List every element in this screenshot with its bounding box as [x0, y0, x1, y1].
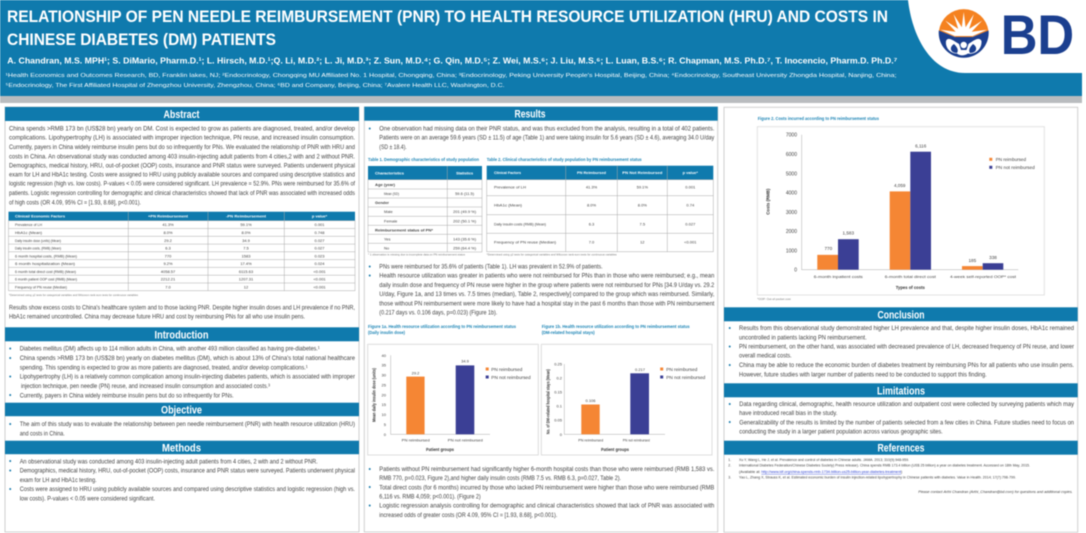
chart: figure 1b hospital stays: Figure 1b. Health resource utilization according to PN reimbursement status [542, 324, 690, 329]
text block: abstract body: Currently, payers in China widely reimburse insulin pens but do so infrequently for PNs. We evaluated the relationship of PNR with HRU and [9, 144, 355, 151]
table: clinical and economic factors: 34.9 [242, 238, 251, 243]
text block: results intro: One observation had missing data on their PNR status, and was thus excluded from the analysis, resulting in a total of 402 patients. [379, 126, 715, 133]
table: clinical and economic factors: Daily insulin costs, (RMB) (Mean) [15, 246, 62, 250]
text block: results costs: RMB 770, p=0.023, Figure 2),and higher daily insulin costs (RMB 7.5 vs. RMB 6.3, p=0.027, Table 2). [379, 475, 621, 482]
affiliations: ¹Health Economics and Outcomes Research, BD, Franklin lakes, NJ; ²Endocrinology, Chongqing MU Affiliated No. 1 Hospital, Chongqing, China; ³Endocrinology, Peking University People's Hospital, Beijing, China; ⁴Endocrinology, Southeast University Zhongda Hospital, Nanjing, China; [6, 72, 897, 79]
text block: results findings: • [368, 264, 372, 271]
heading: introduction [5, 327, 359, 341]
table: clinical and economic factors: 0.748 [314, 230, 325, 235]
table: clinical and economic factors: 17.4% [240, 261, 252, 266]
heading: abstract: Abstract [164, 109, 200, 121]
text block: introduction bullets: • [9, 374, 12, 381]
heading: conclusion [724, 307, 1078, 321]
table 1: demographics: 202 (50.1 %) [453, 218, 477, 223]
text block: conclusion bullets: • [728, 325, 732, 332]
text block: introduction bullets [9, 346, 356, 400]
text block: methods bullets: • [9, 468, 12, 475]
table: clinical and economic factors: 0.027 [314, 238, 325, 243]
table: clinical and economic factors: <0.001 [313, 269, 326, 274]
chart: figure 2 costs: 6,116 [915, 144, 927, 149]
table: clinical and economic factors: 6 month hospitalization (Mean) [15, 261, 76, 266]
text block: results findings [368, 264, 715, 317]
text block: limitations bullets: Generalizability of the results is limited by the number of patients selected from a few cities in China. Future studies need to focus on [739, 419, 1074, 426]
chart: figure 1b hospital stays: (DM-related hospital stays) [542, 330, 595, 335]
title: CHINESE DIABETES (DM) PATIENTS [7, 31, 276, 49]
table: clinical and economic factors: <0.001 [313, 277, 326, 282]
table 2: clinical characteristics: 6.3 [589, 222, 595, 226]
chart: figure 2 costs [757, 116, 1044, 295]
text block: introduction bullets: Diabetes mellitus (DM) affects up to 114 million adults in China, with another 493 million classified as having pre-diabetes.¹ [20, 346, 320, 353]
text block: results findings: daily insulin dose and frequency of PN reuse were higher in the group where patients were not reimbursed for PNs [34.9 U/day vs. 29.2 [379, 282, 715, 289]
table: clinical and economic factors: +PN Reimbursement [148, 214, 189, 219]
table: clinical and economic factors: 7.5 [243, 246, 250, 250]
table 2: clinical characteristics: 0.74 [686, 202, 695, 208]
text block: results costs: increased odds of greater costs (OR 4.09, 95% CI = [1.93, 8.68], p<0.001). [379, 512, 558, 519]
text block: introduction bullets: • [9, 355, 12, 362]
panel: right column [724, 107, 1078, 532]
heading: objective [5, 403, 359, 416]
text block: conclusion bullets: • [728, 362, 732, 369]
table: clinical and economic factors: 0.001 [314, 222, 325, 227]
chart: figure 1a daily insulin dose: 0 [384, 432, 387, 437]
table: clinical and economic factors: 59.1% [240, 222, 252, 227]
text block: introduction bullets: • [9, 393, 12, 400]
table: clinical and economic factors: 29.2 [164, 238, 173, 243]
chart: figure 1a daily insulin dose: 20 [382, 392, 387, 397]
table footnote: *Determined using χ2 tests for categorical variables and Wilcoxon rank-sum tests for continuous variables [9, 293, 139, 297]
chart: figure 1b hospital stays: PN not reimbursed [623, 438, 650, 442]
heading: methods [5, 441, 359, 454]
text block: introduction bullets: Lipohypertrophy (LH) is a relatively common complication among insulin-injecting diabetes patients, which is associated with improper [20, 374, 355, 381]
table: clinical and economic factors: Clinical/ Economic Factors [15, 214, 66, 219]
text block: abstract body: exam for LH and HbA1c testing. Costs were assigned to HRU using publicly available sources and compared using descriptive statistics and [9, 172, 355, 179]
table: clinical and economic factors: 7.0 [165, 284, 172, 290]
chart: figure 2 costs: Figure 2. Costs incurred according to PN reimbursement status [758, 116, 880, 121]
table: clinical and economic factors: 8.0% [241, 230, 251, 235]
chart: figure 2 costs: 338 [989, 255, 997, 260]
text block: methods bullets: An observational study was conducted among 403 insulin-injecting adult patients from 4 cities, 2 with and 2 without PNR. [20, 458, 318, 465]
table 2: clinical characteristics: Clinical Factors [494, 170, 522, 175]
title [7, 8, 888, 49]
table 1: demographics: Yes [384, 236, 391, 241]
text block: conclusion bullets: Results from this observational study demonstrated higher LH prevalence and that, despite higher insulin doses, HbA1c remained [739, 325, 1074, 332]
table: clinical and economic factors: 4058.57 [161, 269, 176, 274]
text block: conclusion bullets: However, future studies with larger number of patients need to be conducted to support this finding. [739, 371, 987, 378]
table: clinical and economic factors: 12 [244, 284, 249, 290]
table 1: demographics: Table 1. Demographic characteristics of study population [368, 157, 479, 162]
text block: results costs: 6,116 vs. RMB 4,059; p<0.001). (Figure 2) [379, 493, 481, 500]
text block: results costs: Logistic regression analysis controlling for demographic and clinical characteristics showed that lack of PNR was associated with [379, 503, 714, 510]
chart: figure 2 costs: Types of costs [896, 285, 925, 290]
chart: figure 1a daily insulin dose: 35 [382, 363, 387, 368]
text block: abstract body: Demographics, medical history, HRU, out-of-pocket (OOP) costs, insurance and PNR status were surveyed. Patients underwent physical [9, 162, 355, 169]
text block: results costs: Patients without PN reimbursement had significantly higher 6-month hospital costs than those who were reimbursed (RMB 1,583 vs. [379, 466, 715, 473]
text block: introduction bullets: Currently, payers in China widely reimburse insulin pens but do so infrequently for PNs. [20, 392, 234, 399]
chart: figure 1b hospital stays: PN reimbursed [666, 367, 698, 372]
text block: limitations bullets: conducting the study in a larger patient population across various geographic sites. [739, 428, 943, 435]
table 2: clinical characteristics: <0.001 [684, 240, 697, 244]
chart: figure 1a daily insulin dose: PN reimbursed [402, 438, 430, 442]
text block: objective: and costs in China. [20, 431, 65, 438]
affiliations [6, 72, 897, 89]
text block: references [728, 458, 1030, 480]
heading: abstract [5, 107, 359, 121]
table: clinical and economic factors: -PN Reimbursement [226, 214, 267, 219]
table: clinical and economic factors: Daily insulin dose (units) (Mean) [15, 238, 62, 243]
panel: results [364, 107, 718, 532]
table: clinical and economic factors: 9.2% [163, 261, 173, 266]
heading: results [364, 107, 718, 121]
text block: conclusion bullets: overall medical costs. [739, 353, 792, 360]
table: clinical and economic factors [8, 212, 355, 291]
chart: figure 1a daily insulin dose: 25 [382, 382, 387, 387]
table 2: clinical characteristics: 12 [640, 240, 645, 244]
heading: references [724, 441, 1078, 455]
text block: results findings: Health resource utilization was greater in patients who were not reimbursed for PNs than in those who were reimbursed; e.g., mean [379, 273, 714, 280]
chart: figure 1a daily insulin dose: 5 [384, 422, 387, 427]
text block: results intro: • [368, 126, 372, 133]
chart: figure 1a daily insulin dose: 10 [382, 412, 387, 417]
text block: results costs: • [368, 466, 372, 473]
text block: abstract body: of high costs (OR 4.09, 95% CI = [1.93, 8.68], p<0.001). [9, 199, 141, 206]
panel: left column [5, 107, 359, 532]
table: clinical and economic factors: 0.023 [314, 253, 325, 258]
table 2: clinical characteristics: 0.001 [685, 184, 696, 190]
table 1: demographics: 59.6 (11.5) [455, 191, 475, 196]
figure 2 footnote: *OOP: Out-of-pocket cost [757, 297, 791, 301]
text block: abstract body: logistic regression (high vs. low costs). P-values < 0.05 were considered significant. LH prevalence = 52.9%. PNs were reimbursed for 35.6% of [9, 181, 355, 188]
chart: figure 1a daily insulin dose: 30 [382, 373, 387, 378]
table: clinical and economic factors: Prevalence of LH [15, 222, 42, 227]
table: clinical and economic factors: 0.027 [314, 246, 325, 250]
text block: results costs: • [368, 503, 372, 510]
text block: introduction bullets: • [9, 346, 12, 353]
text block: references: 3. [728, 476, 731, 480]
text block: abstract body: costs in China. An observational study was conducted among 403 insulin-injecting adult patients from 4 cities,2 with and 2 without PNR. [9, 153, 355, 160]
chart: figure 1a daily insulin dose: 15 [382, 402, 387, 407]
text block: results costs: • [368, 485, 372, 492]
text block: results findings: those without PN reimbursement were more likely to have had a hospital stay in the past 6 months than those with PN reimbursement [379, 300, 715, 307]
heading: limitations [724, 383, 1078, 397]
table: clinical and economic factors: 8.0% [163, 230, 173, 235]
chart: figure 2 costs: 1,583 [843, 231, 854, 236]
icon: BD logo [939, 3, 1074, 66]
table 2: clinical characteristics: 8.0% [638, 202, 647, 208]
table: clinical and economic factors: 6 month hospital costs, (RMB) (Mean) [15, 253, 78, 258]
chart: figure 2 costs: 7000 [786, 133, 797, 139]
chart: figure 2 costs: 6000 [786, 152, 797, 158]
text block: results findings: U/day, Figure 1a, and 13 times vs. 7.5 times (median), Table 2, respectively] compared to the group which was reimbursed. Similarly, [379, 291, 715, 298]
chart: figure 1b hospital stays: Patient groups [601, 447, 630, 452]
chart: figure 1b hospital stays: 0.2 [556, 376, 563, 380]
chart: figure 1b hospital stays: 0.05 [554, 418, 563, 423]
text block: results costs [368, 466, 715, 519]
table: clinical and economic factors: 6 month total direct cost (RMB) (Mean) [15, 269, 77, 274]
chart: figure 1a daily insulin dose: PN not reimbursed [448, 438, 483, 442]
table 2: clinical characteristics: Frequency of PN reuse (Median) [494, 240, 557, 244]
text block: abstract body: patients. Logistic regression controlling for demographic and clinical characteristics showed that lack of PNR was associated with increased odds [9, 190, 355, 197]
authors: A. Chandran, M.S. MPH¹; S. DiMario, Pharm.D.¹; L. Hirsch, M.D.¹;Q. Li, M.D.²; L. Ji, M.D.³; Z. Sun, M.D.⁴; G. Qin, M.D.⁵; Z. Wei, M.S.⁶; J. Liu, M.S.⁶; L. Luan, B.S.⁶; R. Chapman, M.S. Ph.D.⁷, T. Inocencio, Pharm.D. Ph.D.⁷ [7, 56, 898, 66]
text block: references: (Available at: http://www.idf.org/china-spends-rmb-1734-billion-us25-billion-year-diabetes-treatment ) [739, 470, 902, 474]
table 1: demographics [368, 157, 482, 256]
chart: figure 2 costs: 6-month inpatient costs [814, 274, 863, 279]
table 1: demographics: 143 (35.6 %) [453, 236, 477, 241]
chart: figure 2 costs: 6-month total direct cost [885, 274, 937, 279]
table 2: clinical characteristics: 8.0% [587, 202, 596, 208]
table 2: clinical characteristics: HbA1c (Mean) [494, 202, 523, 208]
chart: figure 1b hospital stays: PN not reimbursed [666, 375, 706, 380]
text block: limitations bullets [728, 401, 1075, 435]
heading: results: Results [514, 109, 546, 121]
chart: figure 1b hospital stays: 0.25 [554, 362, 563, 366]
text block: abstract body [9, 126, 356, 206]
text block: conclusion bullets: • [728, 344, 732, 351]
table 2: clinical characteristics: p value* [683, 170, 698, 175]
table 1: demographics: Gender [375, 200, 389, 205]
chart: figure 2 costs: 3000 [786, 210, 797, 216]
chart: figure 1a daily insulin dose: (Daily insulin dose) [368, 330, 406, 335]
text block: results intro: (SD ± 18.4). [379, 144, 407, 151]
contact note: Please contact Arthi Chandran (Arthi_Chandran@bd.com) for questions and additional copies. [918, 490, 1073, 494]
text block: methods bullets: low costs). P-values < 0.05 were considered significant. [20, 495, 155, 502]
chart: figure 1b hospital stays: 0 [560, 432, 563, 437]
text block: results findings: (0.217 days vs. 0.106 days, p=0.023) (Figure 1b). [379, 310, 498, 317]
text block: conclusion bullets: China may be able to reduce the economic burden of diabetes treatment by reimbursing PNs for all patients who use insulin pens. [739, 362, 1074, 369]
table 2: clinical characteristics: 7.5 [640, 222, 646, 226]
text block: methods bullets [9, 458, 355, 502]
table 2: clinical characteristics: Table 2. Clinical characteristics of study population by PN reimbursement status [487, 157, 642, 162]
text block: references: Xu Y, Wang L, He J, et al. Prevalence and control of diabetes in Chinese adults. JAMA. 2013; 310(9):948-959. [739, 458, 909, 462]
chart: figure 2 costs: 1000 [786, 248, 797, 254]
table 2: clinical characteristics: 0.027 [685, 222, 696, 226]
text block: objective [9, 421, 355, 438]
chart: figure 1b hospital stays: 0.106 [585, 398, 596, 403]
chart: figure 2 costs: Costs (RMB) [766, 188, 770, 215]
affiliations: ⁵Endocrinology, The First Affiliated Hospital of Zhengzhou University, Zhengzhou, China; ⁶BD and Company, Beijing, China; ⁷Avalere Health LLC, Washington, D.C. [6, 82, 505, 89]
table 2: clinical characteristics: 7.0 [589, 240, 595, 244]
heading: limitations: Limitations [877, 385, 925, 397]
table 2: clinical characteristics [487, 157, 713, 256]
text block: conclusion bullets [728, 325, 1074, 378]
text block: objective: • [9, 421, 12, 428]
header banner [0, 0, 1082, 103]
text block: references: 2. [728, 464, 731, 468]
chart: figure 2 costs: 2000 [786, 229, 797, 235]
table: clinical and economic factors: HbA1c (Mean) [15, 230, 43, 235]
chart: figure 1a daily insulin dose: 29.2 [412, 370, 420, 375]
text block: limitations bullets: Data regarding clinical, demographic, health resource utilization and outpatient cost were collected by surveying patients which may [739, 401, 1075, 408]
icon: BD logo: BD [1001, 3, 1074, 66]
text block: results costs: Total direct costs (for 6 months) incurred by those who lacked PN reimbursement were higher than those who were reimbursed (RMB [379, 484, 714, 491]
text block: references: International Diabetes Federation/Chinese Diabetes Society) Press release). China spends RMB 173.4 billion (US$ 25 billion) a year on diabetes treatment. Accessed on 18th May, 2015. [739, 464, 1030, 468]
table 1: demographics: Female [384, 218, 398, 223]
chart: figure 1b hospital stays: No. of DM-related hospital stays (Mean) [546, 369, 551, 434]
text block: limitations bullets: have introduced recall bias in the study. [739, 410, 838, 417]
table 1: demographics: Reimbursement status of PN* [375, 227, 433, 232]
table 1: demographics: 259 (64.4 %) [453, 245, 477, 250]
table: clinical and economic factors: <0.001 [313, 284, 326, 290]
heading: methods: Methods [162, 442, 201, 454]
table 2: clinical characteristics: Daily insulin costs (RMB) (Mean) [494, 222, 547, 226]
chart: figure 1a daily insulin dose: 40 [382, 353, 387, 358]
table: clinical and economic factors: Frequency of PN reuse (Median) [15, 284, 68, 290]
chart: figure 2 costs: 185 [968, 258, 977, 263]
table: clinical and economic factors: 0.024 [314, 261, 325, 266]
text block: conclusion bullets: uncontrolled in patients lacking PN reimbursement. [739, 334, 867, 341]
heading: references: References [878, 443, 924, 455]
table 2: clinical characteristics: PN Reimbursed [577, 170, 607, 175]
text block: introduction bullets: injection technique, pen needle (PN) reuse, and increased insulin consumption and associated costs.³ [21, 383, 270, 390]
table 1: demographics: Age (year) [375, 182, 396, 187]
chart: figure 1a daily insulin dose: PN not reimbursed [491, 375, 531, 380]
table: clinical and economic factors: 1583 [242, 253, 251, 258]
text block: abstract body: China spends >RMB 173 bn (US$28 bn) yearly on DM. Cost is expected to grow as patients are diagnosed, treated, and/or develop [9, 126, 356, 133]
chart: figure 1b hospital stays: PN reimbursed [578, 438, 603, 442]
chart: figure 1b hospital stays: 0.15 [554, 390, 563, 395]
text block: abstract conclusion: Results show excess costs to China's healthcare system and to those lacking PNR. Despite higher insulin doses and LH prevalence if no PNR, [9, 305, 355, 312]
table: clinical and economic factors: 6 month patient OOP cost (RMB) (Mean) [15, 277, 78, 282]
table: clinical and economic factors: 6115.63 [239, 269, 254, 274]
table 1: demographics: Characteristics [375, 171, 405, 176]
table: clinical and economic factors: 2212.21 [161, 277, 176, 282]
chart: figure 2 costs: PN not reimbursed [996, 165, 1035, 170]
heading: conclusion: Conclusion [878, 309, 925, 321]
table 2: clinical characteristics: Prevalence of LH [494, 184, 526, 190]
table 1: demographics: No [384, 245, 390, 250]
text block: limitations bullets: • [728, 401, 732, 408]
table 1: demographics: * 1 observation is missing due to incomplete data on PN reimbursement status [368, 252, 466, 256]
chart: figure 1a daily insulin dose: 34.9 [461, 359, 470, 364]
chart: figure 1a daily insulin dose: Figure 1a. Health resource utilization according to PN reimbursement status [368, 324, 517, 329]
table: clinical and economic factors: 1207.31 [239, 277, 254, 282]
table 2: clinical characteristics: 59.1% [637, 184, 648, 190]
chart: figure 1a daily insulin dose: Mean daily insulin dose (units) [372, 367, 376, 422]
chart: figure 2 costs: 770 [824, 246, 833, 251]
chart: figure 2 costs: PN reimbursed [996, 157, 1026, 162]
table 1: demographics: Male [384, 209, 393, 214]
chart: figure 2 costs: 4000 [786, 191, 797, 197]
text block: methods bullets: Demographics, medical history, HRU, out-of-pocket (OOP) costs, insurance and PNR status were surveyed. Patients underwent physical [20, 468, 355, 475]
chart: figure 2 costs: 4-week self-reported OOP* cost [950, 274, 1017, 279]
text block: methods bullets: Costs were assigned to HRU using publicly available sources and compared using descriptive statistics and logistic regression (high vs. [20, 486, 355, 493]
text block: methods bullets: • [9, 459, 12, 466]
chart: figure 1b hospital stays: 0.217 [635, 367, 646, 372]
table: clinical and economic factors: 41.3% [162, 222, 174, 227]
table: clinical and economic factors: p value* [312, 214, 328, 219]
table 1: demographics: 201 (49.9 %) [453, 209, 477, 214]
text block: methods bullets: • [9, 486, 12, 493]
text block: methods bullets: exam for LH and HbA1c testing. [20, 477, 97, 484]
chart: figure 1a daily insulin dose: Patient groups [426, 447, 455, 452]
text block: references: 1. [728, 458, 731, 462]
chart: figure 2 costs: 0 [794, 268, 797, 274]
title: RELATIONSHIP OF PEN NEEDLE REIMBURSEMENT (PNR) TO HEALTH RESOURCE UTILIZATION (HRU) AND COSTS IN [7, 8, 888, 26]
chart: figure 1b hospital stays: 0.1 [556, 404, 563, 409]
heading: objective: Objective [161, 404, 202, 416]
chart: figure 2 costs: 5000 [786, 171, 797, 177]
table 1: demographics: Statistics [456, 171, 474, 176]
text block: references: Yao L, Zhang X, Strauss K, et al. Estimated economic burden of insulin injection-related lipohypertrophy in Chinese patients with diabetes. Value in Health. 2014; 17(7):798-799. [739, 476, 1016, 480]
text block: results findings: • [368, 273, 372, 280]
text block: abstract body: complications. Lipohypertrophy (LH) is associated with improper injection technique, PN reuse, and increased insulin consumption. [9, 135, 355, 142]
text block: introduction bullets: China spends >RMB 173 bn (US$28 bn) yearly on diabetes mellitus (DM), which is about 13% of China's total national healthcare [20, 355, 356, 362]
table: clinical and economic factors: 770 [165, 253, 172, 258]
text block: results findings: PNs were reimbursed for 35.6% of patients (Table 1). LH was prevalent in 52.9% of patients. [379, 264, 603, 271]
text block: objective: The aim of this study was to evaluate the relationship between pen needle reimbursement (PNR) with health resource utilization (HRU) [20, 421, 355, 428]
chart: figure 1b hospital stays [541, 324, 712, 455]
chart: figure 1a daily insulin dose [368, 324, 538, 455]
text block: abstract conclusion: HbA1c remained uncontrolled. China may decrease future HRU and cost by reimbursing PNs for all who use insulin pens. [9, 314, 305, 321]
text block: introduction bullets: spending. This spending is expected to grow as more patients are diagnosed, treated, and/or develop complications.¹ [20, 364, 308, 371]
text block: abstract conclusion [9, 305, 355, 321]
table 2: clinical characteristics: *Determined using χ2 tests for categorical variables and Wilcoxon rank-sum tests for continuous variables [487, 252, 617, 256]
table 1: demographics: Mean (SD) [384, 191, 400, 196]
table: clinical and economic factors: 6.3 [165, 246, 172, 250]
table 2: clinical characteristics: 41.3% [586, 184, 598, 190]
table 2: clinical characteristics: PN Not Reimbursed [622, 170, 663, 175]
chart: figure 1a daily insulin dose: PN reimbursed [491, 367, 523, 372]
heading: introduction: Introduction [154, 329, 209, 341]
text block: results intro [368, 126, 715, 151]
text block: limitations bullets: • [728, 420, 732, 427]
chart: figure 2 costs: 4,059 [894, 183, 906, 188]
text block: results intro: Patients were on an average 59.6 years (SD ± 11.5) of age (Table 1) and were taking insulin for 5.6 years (SD ± 4.6), averaging 34.0 U/day [379, 135, 715, 142]
